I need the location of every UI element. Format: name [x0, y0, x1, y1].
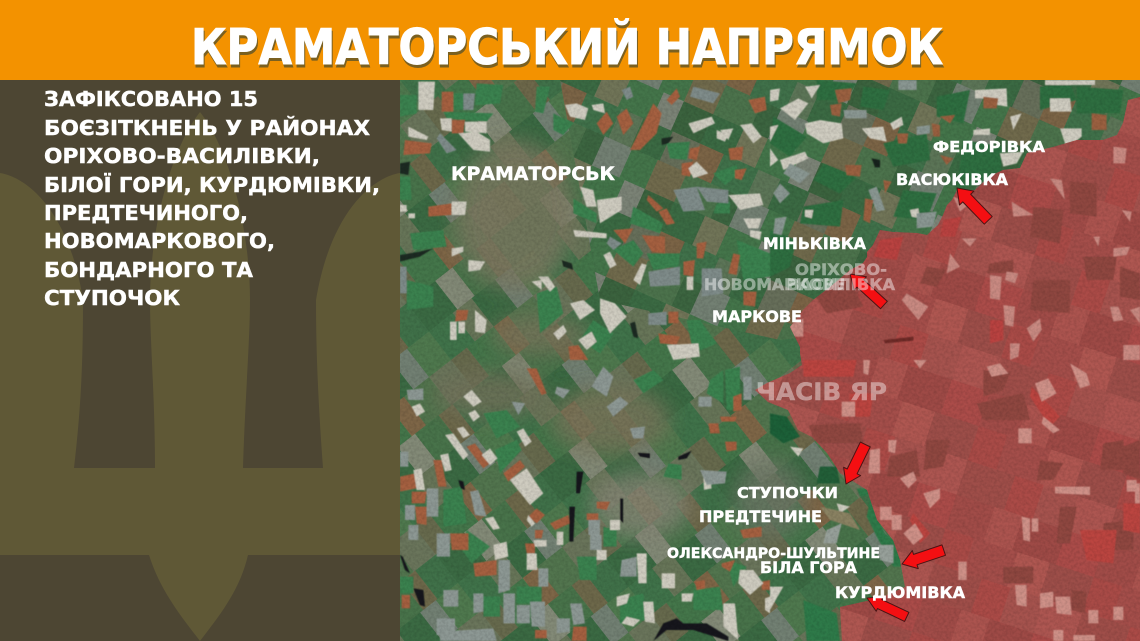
summary text: БОНДАРНОГО ТА: [44, 258, 253, 282]
quadrant SE near-front fields: [770, 413, 902, 641]
label: Bila Hora: БІЛА ГОРА: [760, 558, 858, 577]
map: satellite view of the Kramatorsk direction: [400, 80, 1140, 641]
summary text: БОЄЗІТКНЕНЬ У РАЙОНАХ: [44, 115, 370, 140]
left panel: [0, 80, 400, 641]
label: Novomarkove: НОВОМАРКОВЕ: [704, 275, 845, 294]
summary text: ПРЕДТЕЧИНОГО,: [44, 201, 248, 225]
label: Stupochky: СТУПОЧКИ: [737, 484, 838, 502]
arrow: Stupochky: [837, 440, 874, 488]
label: Orikhovo-Vasylivka: [787, 260, 896, 294]
summary text: ОРІХОВО-ВАСИЛІВКИ,: [44, 144, 320, 168]
arrows marking assault directions: [837, 181, 995, 624]
title: КРАМАТОРСЬКИЙ НАПРЯМОК: [191, 17, 943, 76]
label: Orikhovo-Vasylivka: ОРІХОВО-: [795, 260, 887, 279]
title bar: [0, 0, 1140, 80]
place labels: [451, 138, 1045, 602]
summary text: [44, 87, 380, 310]
summary text: СТУПОЧОК: [44, 286, 180, 310]
label: Chasiv Yar: ЧАСІВ ЯР: [756, 378, 887, 406]
label: Minkivka: МІНЬКІВКА: [763, 234, 867, 253]
quadrant SW fields: [400, 367, 770, 641]
arrow: Orikhovo-Vasylivka: [844, 267, 890, 312]
label: Kurdiumivka: КУРДЮМІВКА: [835, 583, 966, 602]
label: Orikhovo-Vasylivka: ВАСИЛІВКА: [787, 275, 896, 294]
label: Kramatorsk: КРАМАТОРСЬК: [451, 163, 615, 185]
label: Vasiukivka: ВАСЮКІВКА: [896, 170, 1009, 189]
summary text: НОВОМАРКОВОГО,: [44, 229, 275, 253]
quadrant NW fields: [400, 82, 770, 360]
label: Fedorivka: ФЕДОРІВКА: [933, 138, 1045, 156]
label: Oleksandro-Shultyne: ОЛЕКСАНДРО-ШУЛЬТИНЕ: [667, 546, 880, 562]
occupied territory: red overlay: [750, 90, 1140, 641]
label: Predtechyne: ПРЕДТЕЧИНЕ: [699, 507, 822, 526]
town and scrub tones: [435, 140, 806, 540]
arrow: Kurdiumivka: [864, 591, 910, 624]
arrow: Bila Hora: [899, 541, 947, 573]
map texture: [400, 80, 1140, 641]
quadrant NE fields: [770, 80, 1123, 277]
summary text: БІЛОЇ ГОРИ, КУРДЮМІВКИ,: [44, 172, 380, 197]
icon: trident watermark: [0, 112, 400, 641]
label: Markove: МАРКОВЕ: [712, 307, 802, 326]
summary text: ЗАФІКСОВАНО 15: [44, 87, 258, 111]
arrow: Vasiukivka: [950, 181, 995, 227]
